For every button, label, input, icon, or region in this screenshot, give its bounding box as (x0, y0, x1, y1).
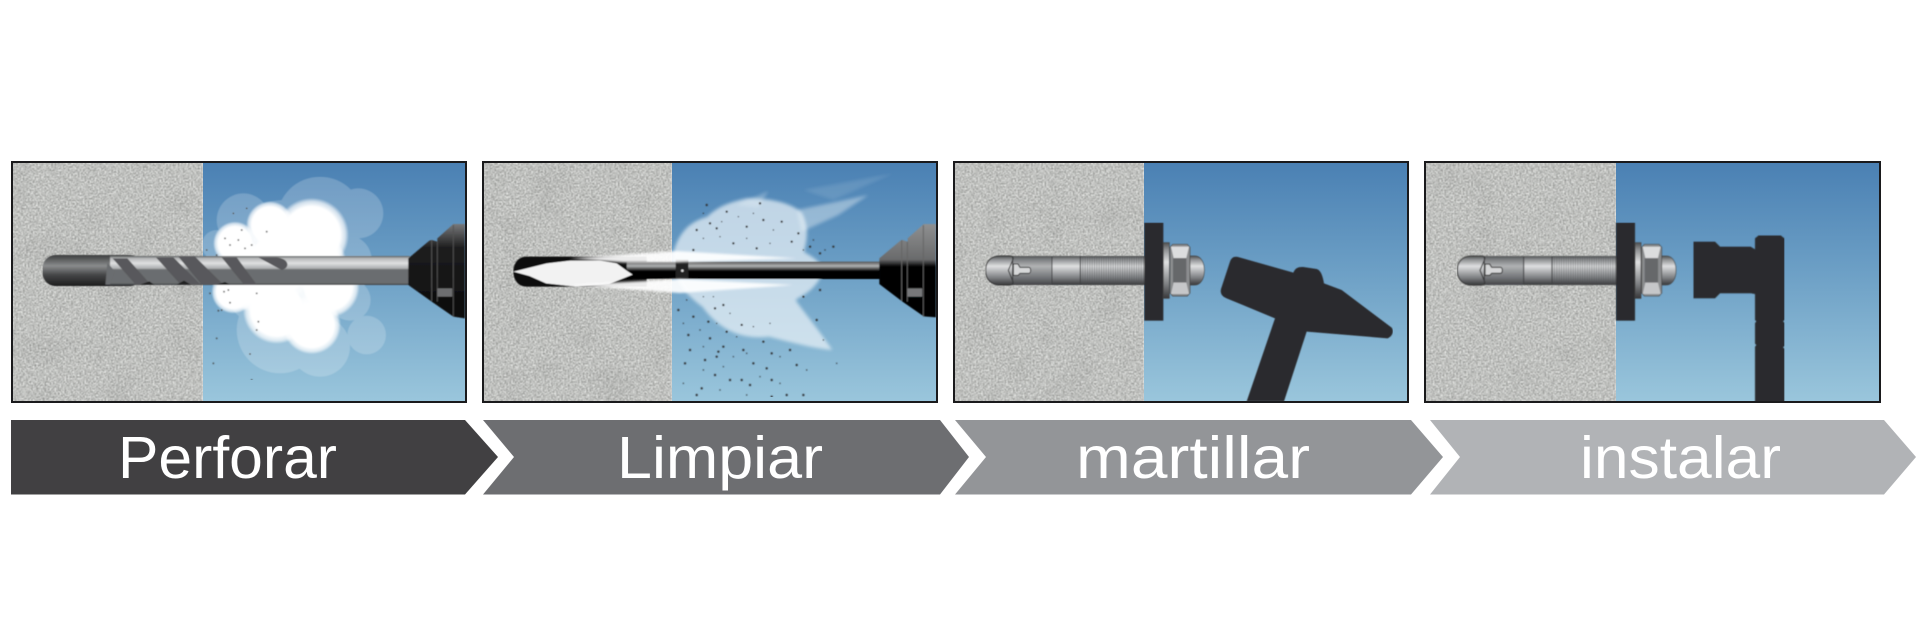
anchor bolt (1457, 223, 1676, 321)
frame (12, 162, 466, 402)
panel: limpiar (483, 162, 937, 402)
concrete wall (12, 162, 203, 402)
sky background (203, 162, 466, 402)
panel: instalar (1425, 162, 1880, 405)
frame (483, 162, 937, 402)
step arrow: Limpiar (483, 420, 969, 494)
panel: martillar (954, 162, 1408, 402)
drill bit (43, 255, 410, 286)
step arrow: martillar (955, 420, 1443, 494)
air gun nozzle (879, 224, 936, 317)
air blast cloud (673, 173, 893, 350)
step arrow: Perforar: Perforar (118, 425, 337, 491)
sky background (1144, 162, 1408, 402)
step arrow: Limpiar: Limpiar (617, 425, 823, 491)
step arrow: Perforar (11, 420, 498, 494)
concrete wall (483, 162, 672, 402)
installation tool (1693, 236, 1784, 405)
white air jets (513, 251, 797, 293)
concrete wall (954, 162, 1144, 402)
debris specks (202, 208, 267, 380)
step arrow: martillar: martillar (1076, 425, 1310, 491)
hammer (1221, 257, 1393, 401)
sky background (1616, 162, 1880, 402)
dust cloud (202, 177, 386, 380)
sky background (672, 162, 937, 402)
panel: perforar (12, 162, 466, 402)
hole and blast (513, 257, 647, 287)
frame (1425, 162, 1880, 402)
concrete wall (1425, 162, 1616, 402)
anchor bolt (986, 223, 1204, 321)
frame (954, 162, 1408, 402)
step arrow: instalar (1430, 420, 1916, 494)
drill chuck (408, 224, 465, 318)
step arrow: instalar: instalar (1580, 425, 1781, 491)
debris specks (678, 203, 833, 397)
blowing rod (627, 262, 880, 279)
